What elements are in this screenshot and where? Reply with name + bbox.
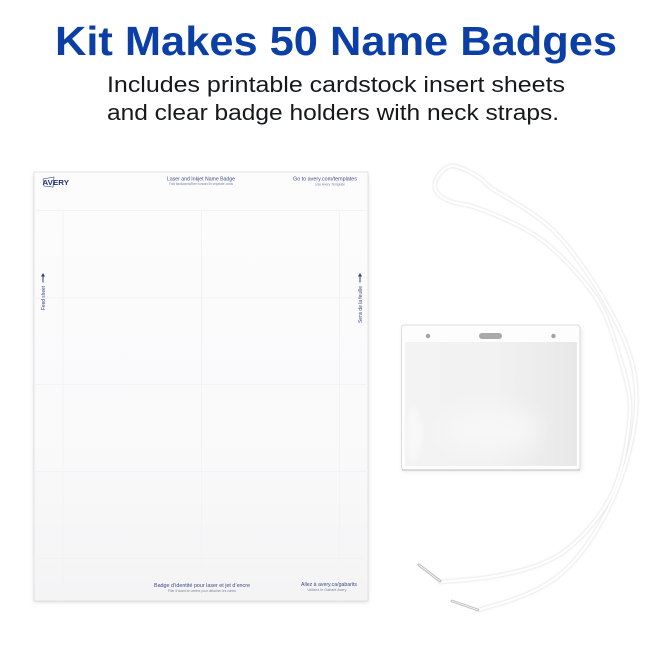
clear pocket xyxy=(405,342,577,466)
text: bottom right French template link: Utilisez le Gabarit Avery xyxy=(308,588,347,592)
title: Kit Makes 50 Name Badges xyxy=(55,18,617,64)
slot xyxy=(479,333,502,339)
text: bottom centre French heading: Plier d’avant en arrière pour détacher les cartes xyxy=(168,589,236,593)
panel: clear badge holder xyxy=(402,325,582,472)
text: bottom right French template link: Allez à avery.ca/gabarits xyxy=(301,582,357,588)
text: top right template link: Use Avery Template xyxy=(315,182,345,186)
arrow: feed sheet right, French: Sens de la feuille xyxy=(358,286,364,323)
strap tip: upper xyxy=(419,565,440,581)
subtitle: and clear badge holders with neck straps. xyxy=(107,100,559,125)
subtitle xyxy=(107,72,565,125)
text: top centre sheet heading: Laser and Inkjet Name Badge xyxy=(167,176,235,182)
subtitle: Includes printable cardstock insert sheets xyxy=(107,72,565,97)
arrow: feed sheet left: Feed sheet xyxy=(41,286,47,310)
text: bottom right French template link xyxy=(301,582,357,592)
neck strap xyxy=(419,166,636,610)
text: top centre sheet heading xyxy=(167,176,235,186)
panel: insert sheet xyxy=(34,172,368,602)
text: bottom centre French heading xyxy=(154,583,250,593)
text: bottom centre French heading: Badge d’identité pour laser et jet d’encre xyxy=(154,583,250,589)
strap tip: lower xyxy=(452,601,478,610)
hole: left xyxy=(426,334,430,338)
hole: right xyxy=(551,334,556,338)
icon: Avery logo: AVERY xyxy=(42,178,69,187)
text: top right template link: Go to avery.com/templates xyxy=(293,176,357,182)
text: top right template link xyxy=(293,176,357,186)
text: top centre sheet heading: Fold backwards/then forward to separate cards xyxy=(169,182,233,186)
